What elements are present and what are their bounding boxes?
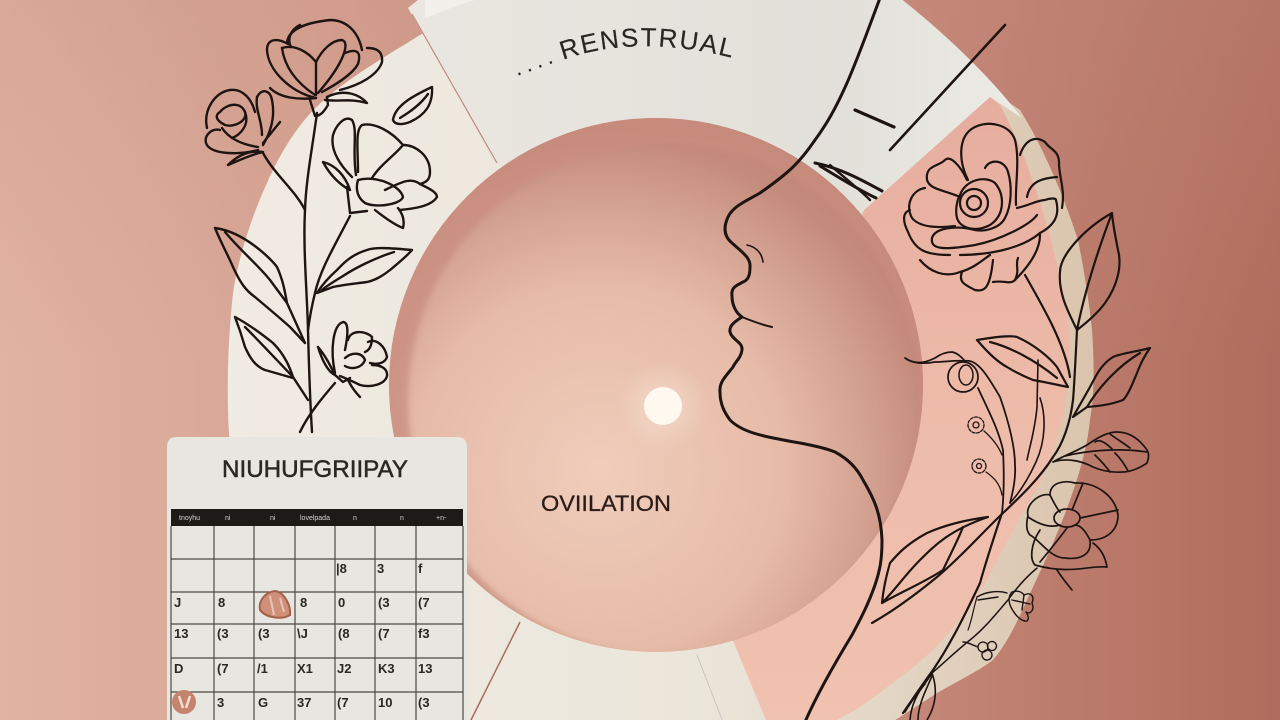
hair strokes xyxy=(815,25,1005,200)
calendar numbers: (7 xyxy=(418,595,430,610)
weekday bar: n xyxy=(400,515,404,522)
weekday bar xyxy=(171,509,463,526)
marked day icon xyxy=(260,591,290,618)
bud xyxy=(393,87,432,124)
calendar numbers: (7 xyxy=(337,695,349,710)
centre disc xyxy=(380,109,932,661)
label: menstrual xyxy=(560,28,732,60)
calendar numbers: 3 xyxy=(217,695,224,710)
calendar grid xyxy=(171,526,463,720)
calendar numbers: /1 xyxy=(257,661,268,676)
calendar numbers: (3 xyxy=(418,695,430,710)
small buds xyxy=(968,417,1002,495)
calendar numbers: 8 xyxy=(218,595,225,610)
face profile line xyxy=(720,0,882,720)
weekday bar: lovelpada xyxy=(300,515,330,522)
floral right xyxy=(872,124,1150,720)
top flower xyxy=(267,20,382,116)
lower stems xyxy=(903,513,1002,713)
calendar numbers: f xyxy=(418,561,423,576)
calendar numbers: K3 xyxy=(378,661,395,676)
rose xyxy=(904,124,1063,290)
lower flower xyxy=(318,322,387,397)
calendar numbers: |8 xyxy=(336,561,347,576)
ring segment: menstrual (top panel) xyxy=(408,0,1022,230)
calendar numbers: 10 xyxy=(378,695,392,710)
calendar numbers: f3 xyxy=(418,626,430,641)
small flowers xyxy=(963,591,1033,660)
ring segment: pink xyxy=(732,97,1070,720)
calendar numbers: J xyxy=(174,595,181,610)
calendar numbers: 37 xyxy=(297,695,311,710)
calendar numbers: (7 xyxy=(217,661,229,676)
rose stem xyxy=(1025,275,1070,377)
label: ovulation: OVIILATION xyxy=(541,491,671,516)
calendar card xyxy=(167,437,467,720)
label: menstrual: RENSTRUAL xyxy=(560,28,732,60)
calendar numbers: 3 xyxy=(377,561,384,576)
weekday bar: tnoyhu xyxy=(179,515,200,522)
marked day icon 2 xyxy=(172,690,196,714)
segment edge lines xyxy=(412,14,723,720)
calendar numbers: (3 xyxy=(217,626,229,641)
weekday bar: n xyxy=(353,515,357,522)
calendar numbers: (8 xyxy=(338,626,350,641)
segment edge highlight xyxy=(425,0,510,18)
calendar numbers xyxy=(174,561,432,710)
weekday bar: ni xyxy=(270,515,276,522)
calendar numbers: (3 xyxy=(258,626,270,641)
stems xyxy=(304,113,317,432)
right flower xyxy=(323,119,437,228)
cycle ring: cream base xyxy=(228,30,1094,720)
feather leaf xyxy=(1053,432,1149,472)
weekday bar: ni xyxy=(225,515,231,522)
calendar numbers: X1 xyxy=(297,661,313,676)
calendar numbers: 8 xyxy=(300,595,307,610)
bottom leaves xyxy=(905,673,935,720)
floral left xyxy=(206,20,437,432)
calendar numbers: (3 xyxy=(378,595,390,610)
calendar numbers: 13 xyxy=(174,626,188,641)
calendar numbers: 13 xyxy=(418,661,432,676)
calendar numbers: 0 xyxy=(338,595,345,610)
calendar title: NIUHUFGRIIPAY xyxy=(222,456,408,483)
leaves xyxy=(1060,213,1119,330)
calendar numbers: (7 xyxy=(378,626,390,641)
ovulation sun xyxy=(618,361,708,451)
calendar numbers: G xyxy=(258,695,268,710)
calendar numbers: \J xyxy=(297,626,308,641)
calendar numbers: D xyxy=(174,661,183,676)
weekday bar: +n- xyxy=(436,515,447,522)
leaves xyxy=(215,228,305,343)
label: menstrual dots: .... xyxy=(510,42,560,81)
left flower xyxy=(206,90,280,165)
bottom flower xyxy=(1027,482,1118,590)
calendar numbers: J2 xyxy=(337,661,351,676)
calendar xyxy=(167,437,467,720)
